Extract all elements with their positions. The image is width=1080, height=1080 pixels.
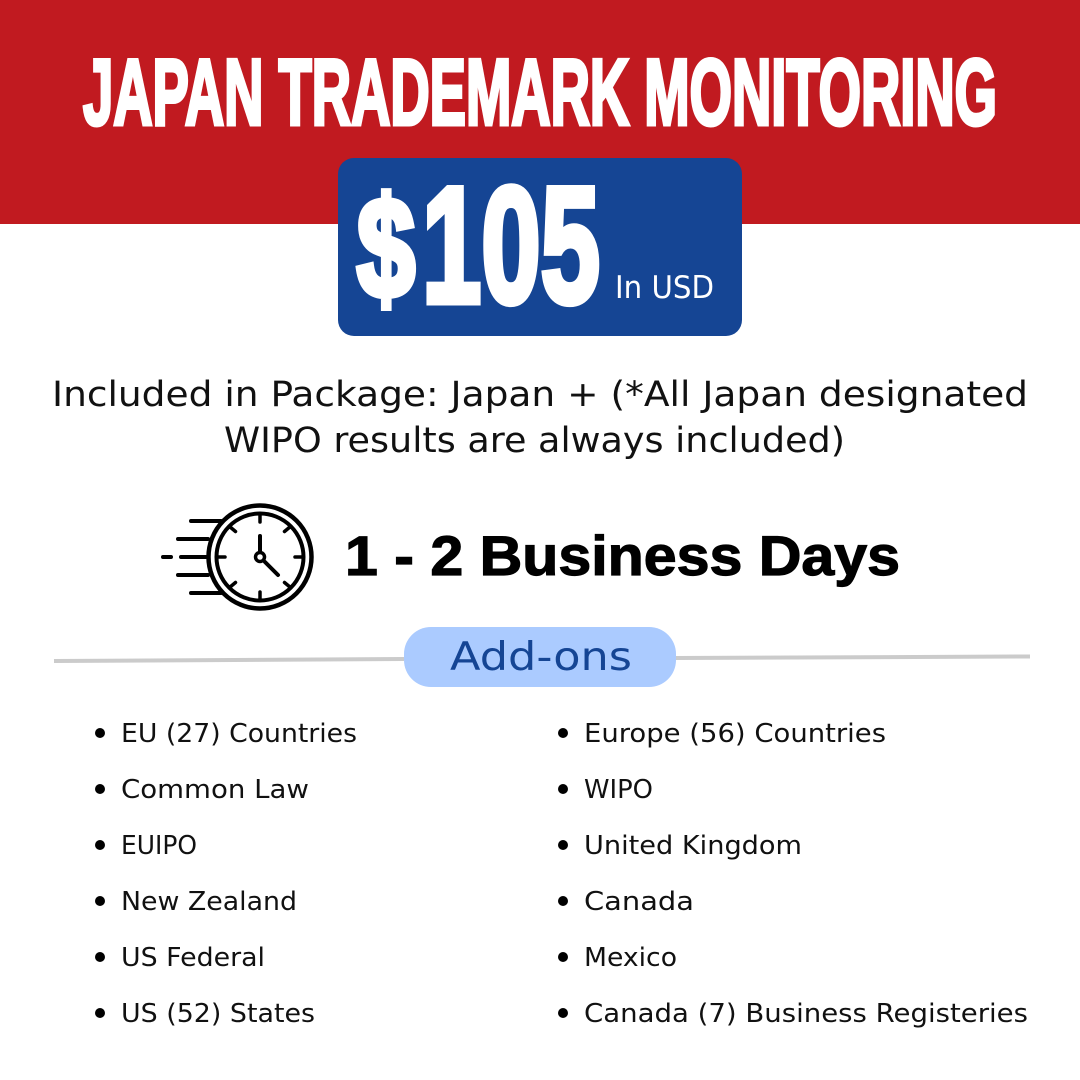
- add-ons list: left column: Common Law: [121, 775, 309, 805]
- price amount: $: [357, 169, 415, 328]
- package description: [52, 375, 1028, 461]
- turnaround time: 1 - 2 Business Days: [345, 524, 900, 587]
- add-ons pill: [404, 627, 676, 687]
- add-ons list: right column: Europe (56) Countries: [584, 719, 886, 749]
- icon: fast clock: [163, 506, 312, 608]
- add-ons list: right column: Canada: [584, 887, 694, 917]
- price amount: [357, 153, 600, 337]
- add-ons label: Add-ons: [450, 635, 632, 680]
- add-ons list: left column: New Zealand: [121, 887, 297, 917]
- add-ons list: left column: EU (27) Countries: [121, 719, 357, 749]
- add-ons list: left column: US (52) States: [121, 999, 315, 1029]
- price amount: 105: [422, 153, 600, 337]
- add-ons divider: [54, 627, 1030, 687]
- package description: WIPO results are always included): [224, 421, 845, 461]
- red header band: [0, 0, 1080, 224]
- currency note: In USD: [615, 270, 714, 306]
- add-ons list: right column: [558, 719, 1028, 1029]
- add-ons list: left column: US Federal: [121, 943, 265, 973]
- price badge: [338, 153, 742, 337]
- add-ons list: right column: Canada (7) Business Registeries: [584, 999, 1028, 1029]
- add-ons list: right column: WIPO: [584, 775, 653, 805]
- add-ons list: right column: Mexico: [584, 943, 677, 973]
- add-ons list: left column: EUIPO: [121, 831, 197, 861]
- add-ons list: right column: United Kingdom: [584, 831, 802, 861]
- package description: Included in Package: Japan + (*All Japan designated: [52, 375, 1028, 415]
- add-ons list: left column: [95, 719, 357, 1029]
